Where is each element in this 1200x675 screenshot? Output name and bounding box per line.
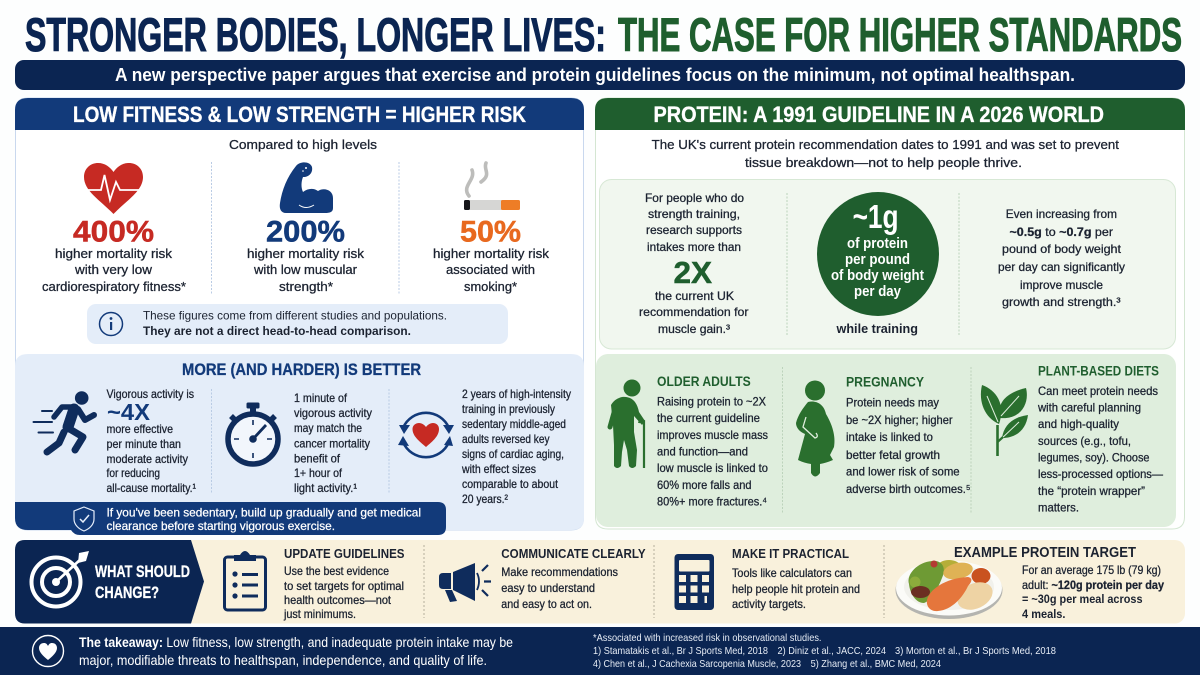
stat: smoking: smoking* [464, 279, 517, 294]
item: update guidelines: to set targets for optimal [284, 579, 404, 593]
panel: protein guideline [595, 98, 1185, 529]
item: older adults: and function—and [657, 445, 748, 459]
caution bar: clearance before starting vigorous exercise. [106, 519, 335, 533]
item: example protein target: = ~30g per meal across [1022, 592, 1143, 606]
item: vigorous activity: more effective [106, 422, 173, 436]
item: one minute: may match the [294, 421, 362, 435]
item: communicate clearly [439, 546, 646, 611]
text: strength training intake: 2X [674, 255, 712, 290]
callout: not head-to-head: These figures come from different studies and populations. [143, 308, 447, 322]
takeaway text: The takeaway: Low fitness, low strength, and inadequate protein intake may be [79, 635, 513, 650]
stat: cardiorespiratory fitness [42, 163, 186, 294]
item: vigorous activity [34, 387, 196, 495]
text: strength training intake: muscle gain.³ [658, 322, 730, 336]
item: older adults: OLDER ADULTS [657, 374, 751, 389]
item: make it practical: Tools like calculators can [732, 566, 852, 580]
intro text [652, 137, 1119, 170]
item: plant-based diets: and high-quality [1038, 417, 1119, 431]
title: STRONGER BODIES, LONGER LIVES: [25, 8, 606, 61]
item: older adults: improves muscle mass [657, 428, 768, 442]
item: pregnancy: be ~2X higher; higher [846, 413, 953, 427]
stat: muscular strength: 200% [266, 216, 345, 248]
takeaway text [79, 635, 513, 668]
item: one minute: benefit of [294, 452, 341, 466]
icon: pregnant person [796, 380, 835, 476]
item: cardiac aging [398, 387, 571, 506]
item: cardiac aging: with effect sizes [461, 462, 536, 476]
item: example protein target: EXAMPLE PROTEIN TARGET [954, 545, 1136, 561]
icon: heart in cycle arrows [398, 413, 454, 457]
item: vigorous activity: ~4X [107, 399, 151, 425]
item: cardiac aging: sedentary middle-aged [462, 417, 566, 431]
panel: more and harder is better [15, 354, 584, 535]
item: one minute: cancer mortality [294, 436, 370, 450]
text: small increases: ~0.5g to ~0.7g per [1010, 225, 1113, 239]
item: plant-based diets: matters. [1038, 501, 1079, 515]
item: vigorous activity: moderate activity [106, 452, 188, 466]
sub-heading: MORE (AND HARDER) IS BETTER [182, 360, 421, 379]
item: vigorous activity: for reducing [106, 466, 160, 480]
text: small increases: per day can significantly [998, 260, 1125, 274]
icon: heart with pulse [84, 163, 143, 214]
subtitle banner: A new perspective paper argues that exercise and protein guidelines focus on the minimum, not optimal healthspan. [115, 65, 1075, 85]
callout circle: 1g per pound [817, 192, 939, 316]
references: 4) Chen et al., J Cachexia Sarcopenia Muscle, 2023 [593, 659, 801, 670]
item: pregnancy: adverse birth outcomes.⁵ [846, 482, 971, 496]
caption: while training: while training [836, 321, 918, 336]
callout circle: 1g per pound: per pound [845, 252, 910, 268]
panel: populations [596, 354, 1176, 527]
item: update guidelines: UPDATE GUIDELINES [284, 546, 405, 561]
panel header: higher risk: LOW FITNESS & LOW STRENGTH = HIGHER RISK [73, 102, 526, 127]
callout circle: 1g per pound: per day [854, 284, 901, 300]
item: example protein target: adult: ~120g protein per day [1022, 578, 1164, 592]
item: make it practical: MAKE IT PRACTICAL [732, 546, 849, 561]
subtitle banner [15, 60, 1185, 90]
panel header: higher risk [15, 98, 584, 130]
icon: calculator [674, 554, 714, 610]
callout circle: 1g per pound: of body weight [831, 268, 924, 284]
stat: cardiorespiratory fitness: higher mortality risk [55, 246, 173, 261]
item: vigorous activity: per minute than [106, 437, 181, 451]
item: make it practical: help people hit protein and [732, 582, 860, 596]
icon: plate of food [896, 560, 1002, 619]
panel header: protein: PROTEIN: A 1991 GUIDELINE IN A 2026 WORLD [654, 102, 1104, 127]
text: strength training intake: the current UK [655, 289, 734, 303]
caution bar: If you've been sedentary, build up gradually and get medical [106, 506, 421, 520]
icon: megaphone [439, 563, 491, 602]
text: small increases: Even increasing from [1006, 207, 1117, 221]
intro text: The UK's current protein recommendation dates to 1991 and was set to prevent [652, 137, 1119, 152]
item: one minute: light activity.¹ [294, 481, 357, 495]
banner: what should change [15, 540, 204, 624]
item: update guidelines: Use the best evidence [284, 564, 389, 578]
item: cardiac aging: signs of cardiac aging, [462, 447, 564, 461]
callout: not head-to-head: They are not a direct head-to-head comparison. [143, 324, 411, 338]
item: update guidelines: health outcomes—not [284, 593, 392, 607]
banner: what should change: CHANGE? [95, 583, 159, 602]
item: plant-based diets: sources (e.g., tofu, [1038, 434, 1131, 448]
icon: target [32, 551, 89, 606]
item: communicate clearly: COMMUNICATE CLEARLY [501, 546, 646, 561]
item: plant-based diets: with careful planning [1037, 401, 1141, 415]
item: older adults: 60% more falls and [657, 478, 752, 492]
text: strength training intake [639, 191, 749, 336]
text: small increases: improve muscle [1020, 278, 1103, 292]
callout circle: 1g per pound: of protein [847, 236, 908, 252]
item: example protein target: 4 meals. [1022, 607, 1066, 621]
references: 2) Diniz et al., JACC, 2024 [778, 646, 886, 657]
item: one minute [228, 391, 372, 495]
icon: cigarette [464, 163, 520, 210]
item: cardiac aging: adults reversed key [462, 432, 550, 446]
text: small increases [998, 207, 1125, 309]
item: plant-based diets: legumes, soy). Choose [1038, 451, 1150, 465]
stat: cardiorespiratory fitness: 400% [73, 216, 154, 248]
item: communicate clearly: and easy to act on. [501, 597, 592, 611]
text: strength training intake: For people who do [645, 191, 744, 205]
item: cardiac aging: 2 years of high-intensity [462, 387, 571, 401]
item: plant-based diets [981, 364, 1163, 515]
stat: muscular strength: higher mortality risk [247, 246, 365, 261]
references: 5) Zhang et al., BMC Med, 2024 [811, 659, 941, 670]
stat: cardiorespiratory fitness: with very low [74, 262, 153, 277]
stat: muscular strength: with low muscular [253, 262, 358, 277]
callout: not head-to-head [87, 304, 508, 344]
item: pregnancy [796, 375, 971, 496]
text: strength training intake: recommendation for [639, 305, 749, 319]
item: example protein target [896, 545, 1164, 621]
item: one minute: vigorous activity [294, 406, 372, 420]
item: communicate clearly: easy to understand [501, 581, 595, 595]
callout circle: 1g per pound: ~1g [853, 198, 899, 235]
references: 1) Stamatakis et al., Br J Sports Med, 2018 [593, 646, 768, 657]
item: update guidelines [224, 546, 405, 621]
item: plant-based diets: the “protein wrapper” [1038, 484, 1145, 498]
item: older adults: 80%+ more fractures.⁴ [657, 495, 767, 509]
item: pregnancy: and lower risk of some [846, 465, 960, 479]
icon: info [100, 312, 122, 336]
item: example protein target: For an average 175 lb (79 kg) [1022, 563, 1161, 577]
panel: what should change [15, 540, 1185, 624]
text: strength training intake: research supports [646, 223, 742, 237]
stat: muscular strength [247, 162, 365, 294]
item: plant-based diets: PLANT-BASED DIETS [1038, 364, 1159, 379]
icon: flexed arm [280, 162, 333, 213]
stat: cardiorespiratory fitness: cardiorespiratory fitness* [42, 279, 186, 294]
takeaway text: major, modifiable threats to healthspan, independence, and quality of life. [79, 653, 487, 668]
item: one minute: 1 minute of [294, 391, 348, 405]
references: 3) Morton et al., Br J Sports Med, 2018 [895, 646, 1056, 657]
item: older adults [610, 374, 768, 509]
icon: stopwatch [228, 402, 278, 464]
item: plant-based diets: Can meet protein needs [1038, 384, 1158, 398]
item: cardiac aging: 20 years.² [462, 492, 508, 506]
item: make it practical: activity targets. [732, 597, 806, 611]
banner: what should change: WHAT SHOULD [95, 562, 190, 581]
stat: smoking: associated with [446, 262, 535, 277]
item: cardiac aging: training in previously [462, 402, 555, 416]
text: small increases: growth and strength.³ [1002, 295, 1120, 309]
comparison caption: Compared to high levels [229, 137, 378, 152]
icon: shield [74, 507, 94, 531]
references: *Associated with increased risk in observational studies. [593, 633, 822, 644]
text: strength training intake: strength training, [648, 207, 740, 221]
item: cardiac aging: comparable to about [462, 477, 559, 491]
item: vigorous activity: Vigorous activity is [106, 387, 194, 401]
stat: muscular strength: strength* [279, 279, 333, 294]
stat: smoking: higher mortality risk [433, 246, 550, 261]
icon: heart in circle [32, 636, 64, 666]
text: strength training intake: intakes more than [647, 240, 741, 254]
item: older adults: Raising protein to ~2X [657, 395, 766, 409]
item: pregnancy: PREGNANCY [846, 375, 924, 390]
panel header: protein [595, 98, 1185, 130]
item: pregnancy: Protein needs may [846, 396, 939, 410]
panel: protein targets [600, 180, 1176, 349]
caution bar [15, 502, 446, 535]
text: small increases: pound of body weight [1002, 242, 1122, 256]
item: pregnancy: better fetal growth [846, 448, 940, 462]
item: communicate clearly: Make recommendations [501, 565, 618, 579]
item: one minute: 1+ hour of [294, 466, 343, 480]
stat: smoking: 50% [460, 216, 521, 248]
icon: leaves [981, 385, 1028, 456]
item: older adults: low muscle is linked to [657, 461, 768, 475]
footer band [0, 627, 1200, 675]
item: pregnancy: intake is linked to [846, 430, 933, 444]
item: older adults: the current guideline [657, 411, 760, 425]
item: update guidelines: just minimums. [283, 607, 356, 621]
panel: low fitness and low strength [15, 98, 584, 535]
stat: smoking [433, 163, 550, 294]
item: vigorous activity: all-cause mortality.¹ [106, 481, 196, 495]
item: make it practical [674, 546, 860, 611]
references [593, 633, 1056, 670]
intro text: tissue breakdown—not to help people thrive. [745, 155, 1022, 170]
item: plant-based diets: less-processed options— [1038, 467, 1163, 481]
icon: clipboard [224, 551, 266, 610]
icon: runner [34, 391, 94, 452]
icon: older adult with cane [610, 380, 645, 468]
